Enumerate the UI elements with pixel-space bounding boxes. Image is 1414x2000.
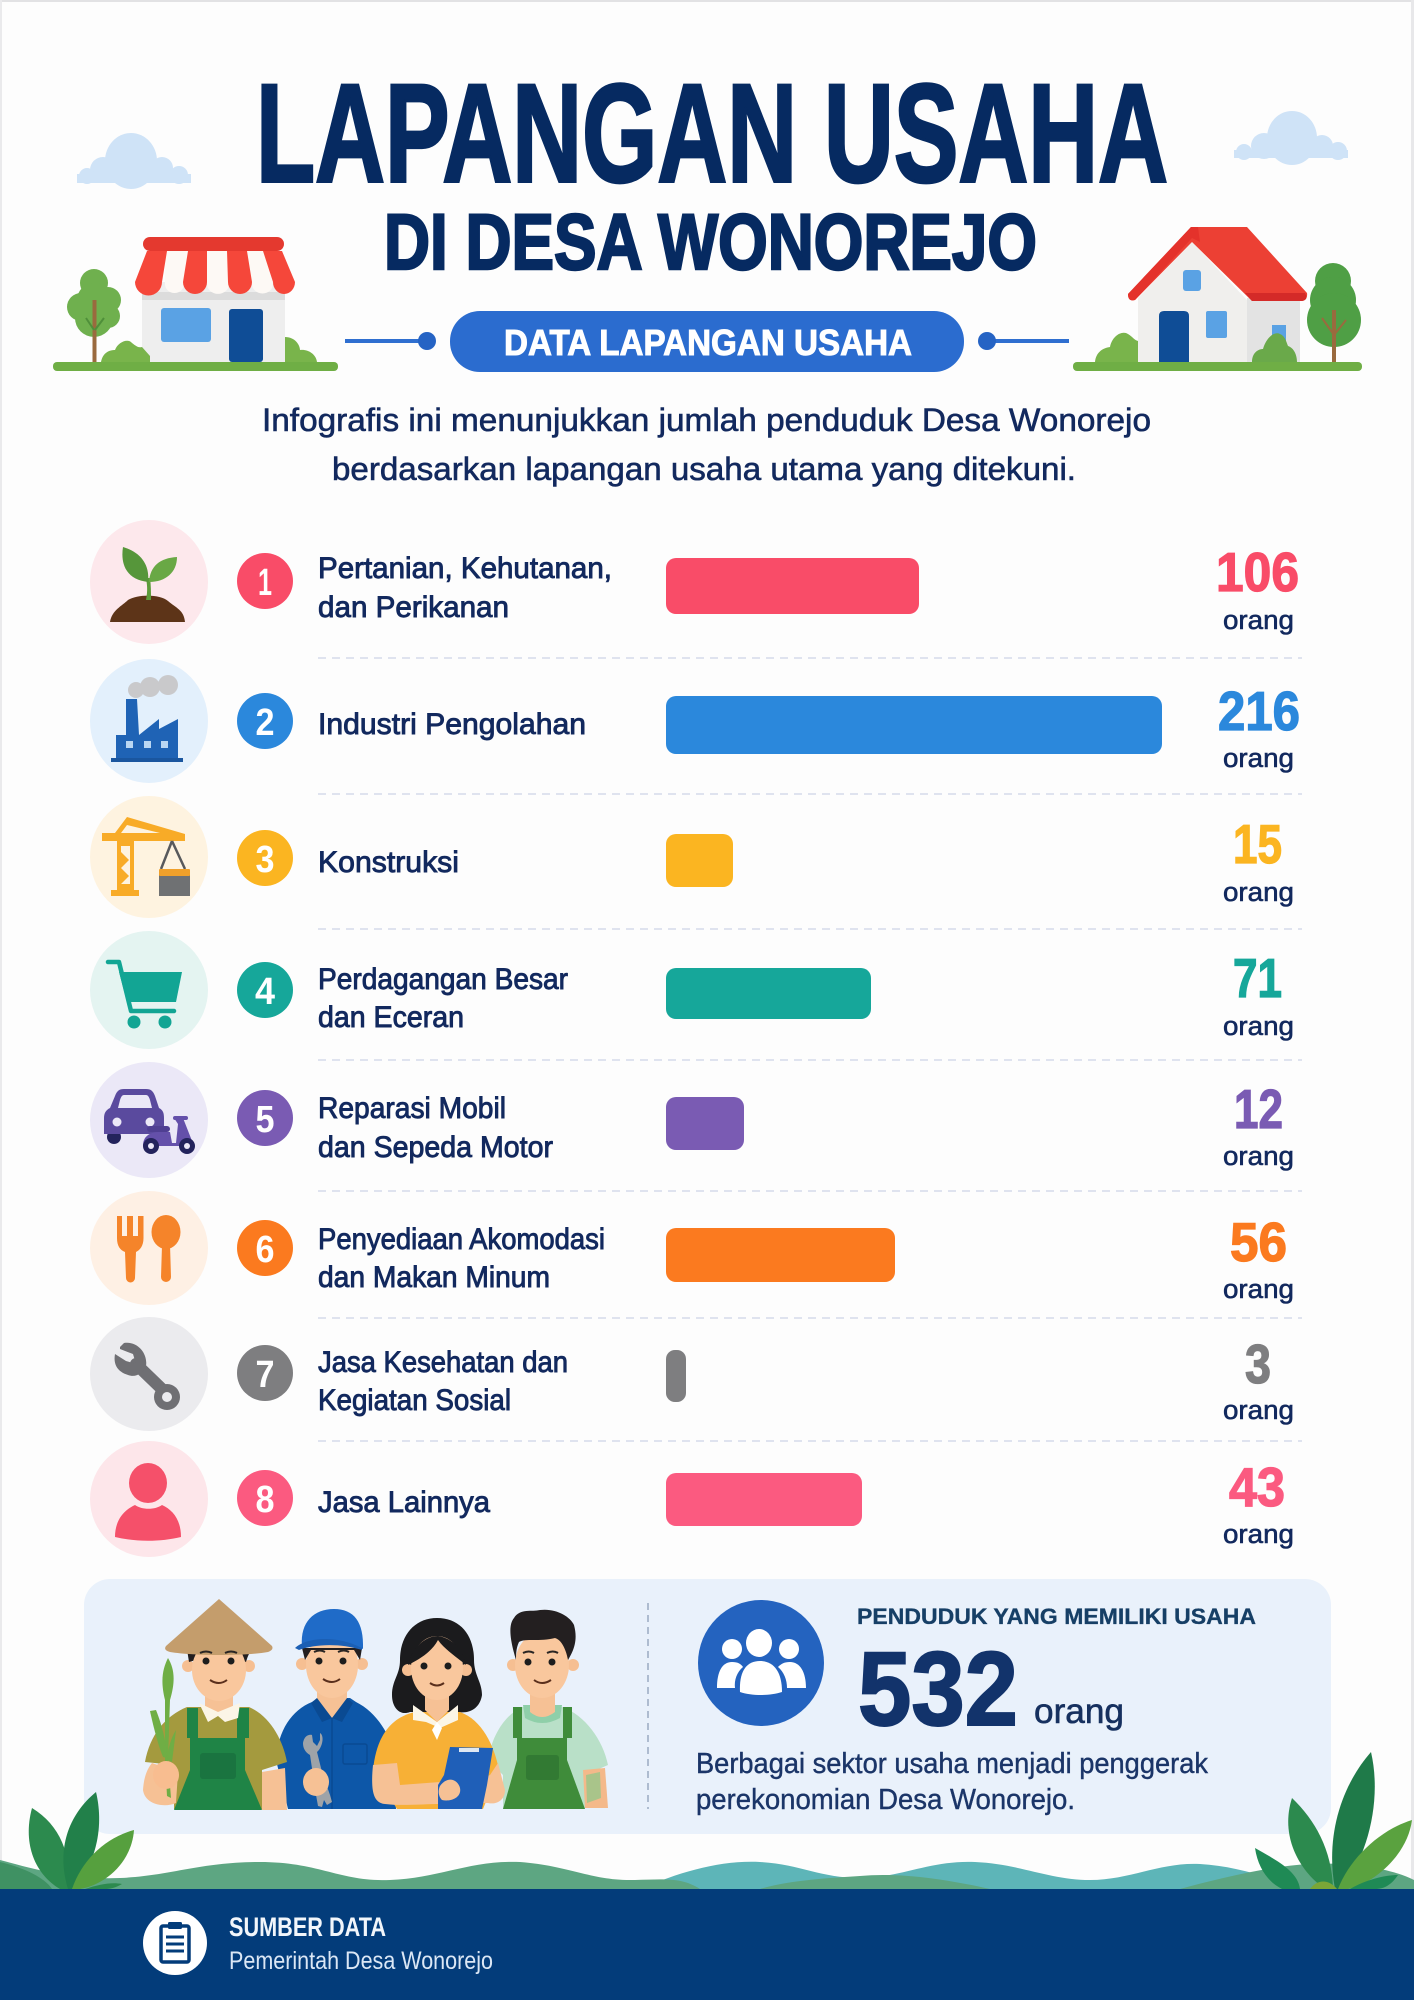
panel: summary xyxy=(84,1579,1331,1834)
source text: Pemerintah Desa Wonorejo xyxy=(229,1947,493,1975)
icon: clipboard xyxy=(143,1911,207,1975)
icon: plant xyxy=(90,520,208,644)
label: Perdagangan Besar xyxy=(318,963,568,996)
label: Jasa Kesehatan dan xyxy=(318,1346,568,1379)
icon: car and scooter xyxy=(90,1062,208,1178)
icon: wrench xyxy=(90,1317,208,1431)
icon: shop tree xyxy=(67,269,121,362)
worker: young man xyxy=(488,1610,608,1809)
row 1: pertanian: 106 xyxy=(1216,541,1299,603)
icon: right leaves xyxy=(1255,1752,1412,1889)
hills xyxy=(0,1860,1414,1889)
icon: left leaves xyxy=(0,1792,134,1889)
intro text: Infografis ini menunjukkan jumlah penduduk Desa Wonorejo xyxy=(262,402,1151,438)
row 5: reparasi: 12 xyxy=(1234,1078,1283,1140)
stat description xyxy=(696,1748,1208,1816)
badge: data lapangan usaha: DATA LAPANGAN USAHA xyxy=(504,322,912,363)
icon: house tree xyxy=(1307,263,1361,362)
row 1: pertanian: 1 xyxy=(258,562,272,604)
stat unit: orang xyxy=(1034,1692,1124,1731)
row 1: pertanian xyxy=(90,520,1299,644)
row 8: jasa lainnya xyxy=(90,1441,1294,1557)
row 4: perdagangan: 4 xyxy=(255,971,275,1013)
label xyxy=(318,1092,553,1164)
row 7: kesehatan: 3 xyxy=(1245,1333,1271,1395)
row 3: konstruksi: orang xyxy=(1223,877,1294,907)
stat number: 532 xyxy=(858,1631,1018,1748)
icon: crane xyxy=(90,796,208,918)
row 4: perdagangan xyxy=(90,931,1294,1049)
worker: farmer xyxy=(143,1599,287,1810)
icon: right cloud xyxy=(1234,111,1348,165)
label: Industri Pengolahan xyxy=(318,708,586,741)
footer xyxy=(0,1889,1414,2000)
row 6: akomodasi: 56 xyxy=(1230,1211,1287,1273)
row 2: industri: orang xyxy=(1223,743,1294,773)
row 3: konstruksi xyxy=(90,796,1294,918)
row 6: akomodasi xyxy=(90,1191,1294,1305)
source text: SUMBER DATA xyxy=(229,1912,386,1942)
stat description: Berbagai sektor usaha menjadi penggerak xyxy=(696,1748,1208,1780)
row 2: industri: 2 xyxy=(256,702,274,744)
icon: fork and spoon xyxy=(90,1191,208,1305)
illustration: four workers xyxy=(143,1599,608,1810)
badge: data lapangan usaha xyxy=(450,311,964,372)
label: Konstruksi xyxy=(318,846,459,879)
connector left xyxy=(345,332,436,350)
row 5: reparasi: 5 xyxy=(256,1099,274,1141)
row 8: jasa lainnya: 8 xyxy=(256,1479,274,1521)
stat description: perekonomian Desa Wonorejo. xyxy=(696,1784,1075,1816)
label: dan Sepeda Motor xyxy=(318,1131,553,1164)
row 2: industri: 216 xyxy=(1218,680,1300,742)
label: Pertanian, Kehutanan, xyxy=(318,552,612,585)
row 4: perdagangan: 71 xyxy=(1233,947,1282,1009)
row 5: reparasi: orang xyxy=(1223,1141,1294,1171)
label xyxy=(318,1346,568,1417)
worker: woman xyxy=(372,1618,505,1809)
awning xyxy=(135,237,295,296)
stat heading: PENDUDUK YANG MEMILIKI USAHA xyxy=(857,1604,1256,1629)
row 3: konstruksi: 15 xyxy=(1233,813,1282,875)
row 4: perdagangan: orang xyxy=(1223,1011,1294,1041)
icon: people group xyxy=(698,1600,824,1726)
row 6: akomodasi: 6 xyxy=(256,1229,274,1271)
label xyxy=(318,552,612,624)
row 3: konstruksi: 3 xyxy=(256,839,274,881)
source text xyxy=(229,1912,493,1975)
connector right xyxy=(978,332,1069,350)
label: dan Makan Minum xyxy=(318,1261,550,1294)
row 1: pertanian: orang xyxy=(1223,605,1294,635)
row 5: reparasi xyxy=(90,1062,1294,1178)
icon: house xyxy=(1073,227,1362,371)
label xyxy=(318,1223,605,1294)
icon: shop xyxy=(53,237,338,371)
row 2: industri xyxy=(90,659,1300,783)
intro text: berdasarkan lapangan usaha utama yang ditekuni. xyxy=(332,451,1076,487)
label: Kegiatan Sosial xyxy=(318,1384,511,1417)
icon: cart xyxy=(90,931,208,1049)
row 8: jasa lainnya: 43 xyxy=(1229,1456,1285,1518)
row 6: akomodasi: orang xyxy=(1223,1274,1294,1304)
icon: left cloud xyxy=(77,133,191,189)
subtitle: DI DESA WONOREJO xyxy=(384,197,1037,286)
label xyxy=(318,963,568,1034)
worker: mechanic xyxy=(276,1609,396,1809)
label: Jasa Lainnya xyxy=(318,1486,490,1519)
row 8: jasa lainnya: orang xyxy=(1223,1519,1294,1549)
icon: person xyxy=(90,1441,208,1557)
label: Penyediaan Akomodasi xyxy=(318,1223,605,1256)
label: dan Eceran xyxy=(318,1001,464,1034)
icon: factory xyxy=(90,659,208,783)
intro text xyxy=(262,402,1151,487)
row 7: kesehatan xyxy=(90,1317,1294,1431)
label: dan Perikanan xyxy=(318,591,509,624)
row 7: kesehatan: 7 xyxy=(256,1354,274,1396)
row 7: kesehatan: orang xyxy=(1223,1395,1294,1425)
label: Reparasi Mobil xyxy=(318,1092,506,1125)
